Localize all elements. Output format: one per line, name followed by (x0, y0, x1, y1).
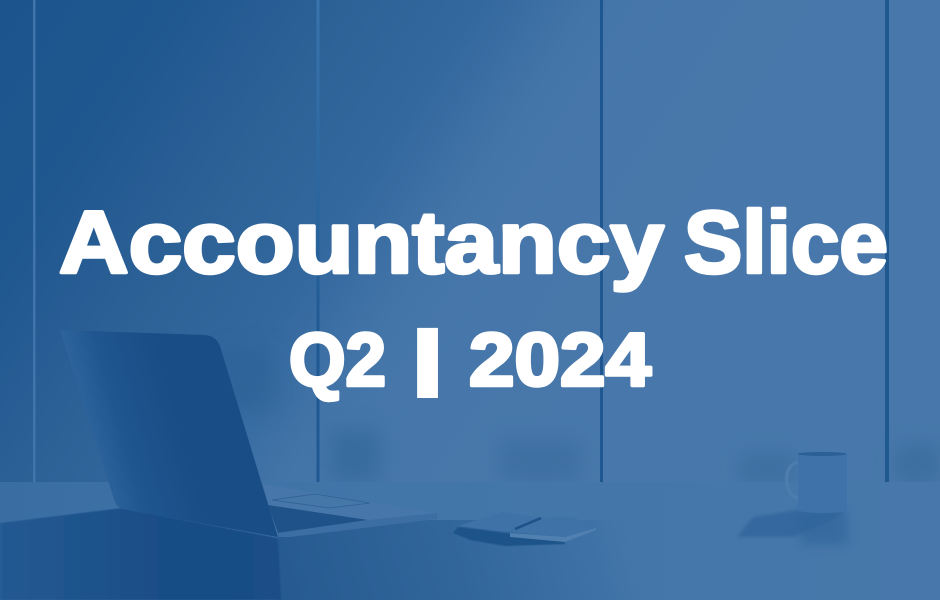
title word: Accountancy: Accountancy (59, 192, 664, 292)
subtitle: quarter and year (289, 315, 651, 402)
table surface (0, 482, 940, 600)
laptop trackpad (272, 494, 370, 508)
laptop base (263, 484, 437, 537)
quarter: Q2 (289, 318, 386, 402)
notebook left page (458, 512, 540, 532)
window frame lines (33, 0, 889, 482)
notebook shadow and underside (453, 527, 565, 546)
coffee mug (737, 452, 848, 545)
mug handle (786, 462, 810, 498)
pen (515, 518, 541, 529)
laptop (60, 330, 437, 537)
laptop lid (60, 330, 278, 537)
year: 2024 (469, 318, 651, 402)
mug shadow (737, 510, 847, 537)
laptop keyboard (268, 505, 368, 533)
title (59, 192, 888, 292)
mug rim (798, 452, 846, 456)
laptop front edge (278, 513, 437, 537)
title word: Slice: Slice (684, 192, 888, 292)
mug body (798, 452, 847, 513)
notebook page edge (510, 528, 596, 542)
notebook (453, 512, 596, 546)
separator: | (405, 315, 450, 398)
notebook right page (510, 517, 596, 537)
